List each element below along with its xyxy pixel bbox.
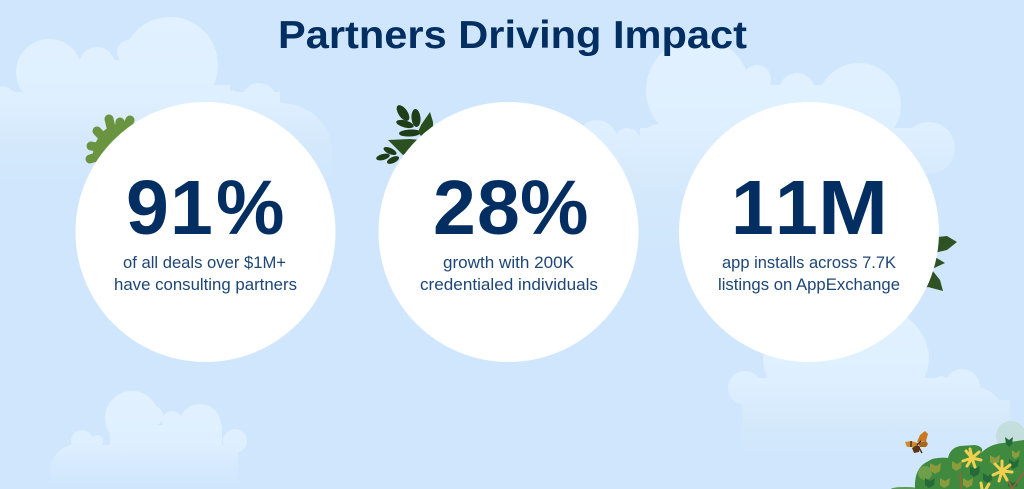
cloud: top right bbox=[577, 38, 955, 270]
leaf cluster: right of third circle bbox=[925, 236, 957, 291]
stat circle: 28% bbox=[378, 102, 638, 362]
icon: butterfly bbox=[905, 431, 928, 453]
stat circle: 11M bbox=[679, 102, 939, 362]
flower: yellow right bbox=[993, 461, 1012, 481]
stat caption: deals: of all deals over $1M+ bbox=[123, 254, 286, 272]
stat caption: credentials: growth with 200K bbox=[443, 254, 574, 272]
flower: yellow left bbox=[963, 449, 981, 467]
stat caption: installs bbox=[718, 254, 900, 294]
stat caption: installs: listings on AppExchange bbox=[718, 276, 900, 294]
cloud: top left bbox=[0, 17, 332, 197]
leaf cluster: green behind first circle bbox=[90, 119, 130, 165]
leaf cluster: dark behind second circle bbox=[375, 103, 433, 165]
stat caption: deals bbox=[114, 254, 297, 294]
stat value: 91%: 91% bbox=[126, 165, 284, 251]
stat value: 11M: 11 bbox=[731, 165, 818, 251]
stat caption: credentials bbox=[420, 254, 598, 294]
flower: yellow bottom bbox=[981, 483, 989, 489]
icon: flowering bush bbox=[891, 421, 1024, 489]
stat caption: installs: app installs across 7.7K bbox=[722, 254, 896, 272]
stat caption: credentials: credentialed individuals bbox=[420, 276, 598, 294]
stat circle: 91% bbox=[76, 102, 336, 362]
title: Partners Driving Impact bbox=[278, 14, 747, 57]
stat caption: deals: have consulting partners bbox=[114, 276, 297, 294]
bush foliage bbox=[930, 450, 1020, 488]
stat value: 28%: 28% bbox=[433, 165, 588, 251]
cloud: lower right bbox=[728, 298, 1010, 478]
stat value: 11M: M bbox=[818, 165, 888, 251]
cloud: lower left bbox=[50, 391, 247, 489]
